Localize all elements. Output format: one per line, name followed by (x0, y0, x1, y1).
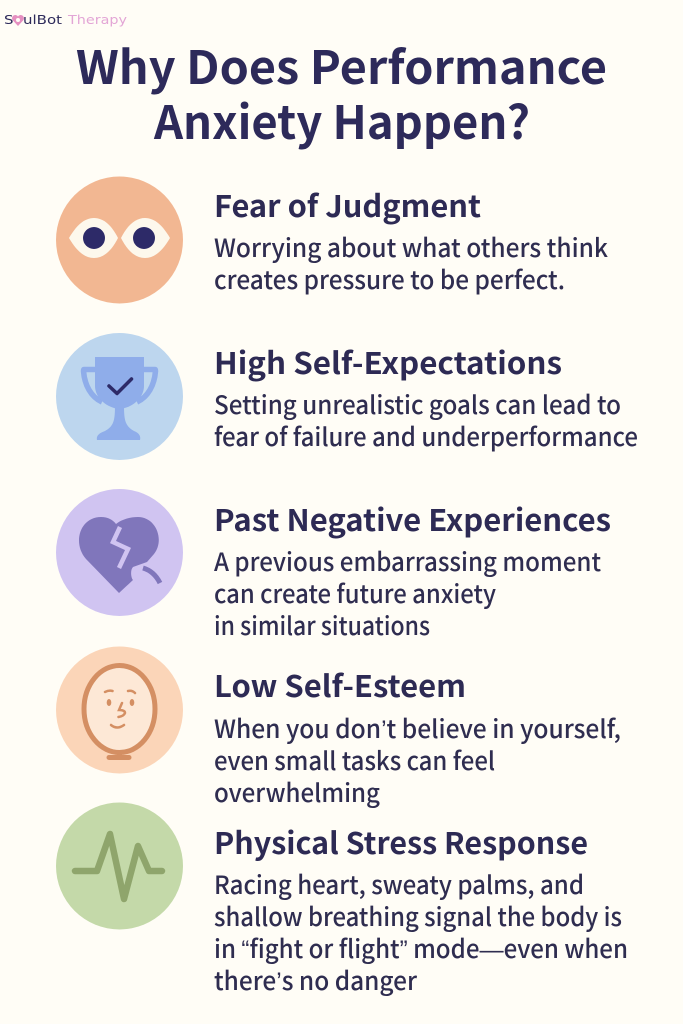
heading: Fear of Judgment (214, 182, 481, 226)
logo: SoulBot Therapy: Therapy (67, 12, 128, 27)
logo: SoulBot Therapy (4, 12, 128, 27)
icon: heartbeat pulse (56, 802, 183, 930)
description: shallow breathing signal the body is (214, 898, 622, 934)
description: can create future anxiety (214, 575, 496, 611)
heading: Physical Stress Response (214, 819, 588, 863)
panel: low self-esteem (56, 646, 621, 810)
description: A previous embarrassing moment (214, 543, 601, 579)
description: overwhelming (214, 774, 381, 810)
description: When you don’t believe in yourself, (214, 710, 621, 746)
title: Why Does Performance (76, 32, 607, 98)
description (214, 710, 621, 810)
description: in similar situations (214, 607, 430, 643)
description: there’s no danger (214, 962, 418, 998)
description: even small tasks can feel (214, 742, 495, 778)
description: Setting unrealistic goals can lead to (214, 386, 621, 422)
description: in “fight or flight” mode—even when (214, 930, 628, 966)
description: Worrying about what others think (214, 229, 609, 265)
icon: watching eyes (56, 176, 183, 304)
description: creates pressure to be perfect. (214, 261, 565, 297)
description (214, 543, 601, 643)
panel: past negative experiences (56, 489, 611, 643)
description: Racing heart, sweaty palms, and (214, 866, 584, 902)
description (214, 229, 609, 297)
panel: high self-expectations (56, 333, 638, 460)
description: fear of failure and underperformance (214, 418, 638, 454)
heading: Past Negative Experiences (214, 496, 611, 540)
title: Anxiety Happen? (153, 87, 530, 153)
logo: SoulBot Therapy: S ulBot (4, 12, 62, 27)
icon: broken heart (56, 489, 183, 616)
description (214, 866, 628, 998)
panel: physical stress response (56, 802, 628, 998)
icon: trophy with check (56, 333, 183, 460)
heading: High Self-Expectations (214, 339, 562, 383)
description (214, 386, 638, 454)
panel: fear of judgment (56, 176, 609, 304)
heading: Low Self-Esteem (214, 662, 466, 706)
icon: mirror with face (56, 646, 183, 774)
title (76, 32, 607, 153)
